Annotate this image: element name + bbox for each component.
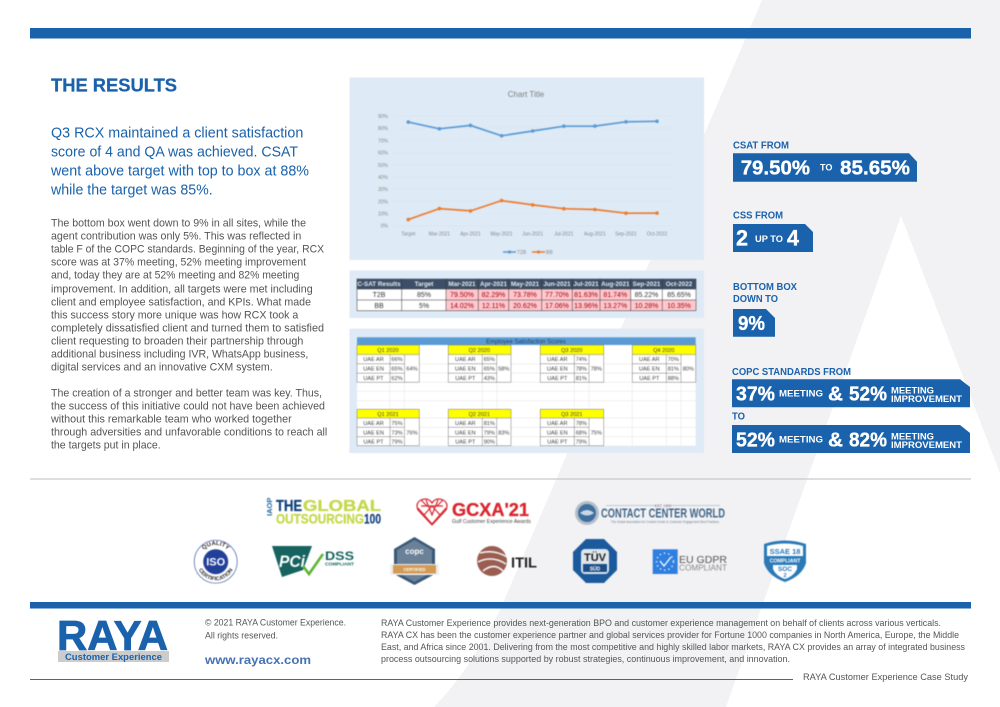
badge: COPC from: MEETING bbox=[779, 389, 823, 399]
stat: CSAT: 79.50% bbox=[741, 157, 810, 180]
logo: ITIL bbox=[477, 546, 537, 576]
body paragraph one: table F of the COPC standards. Beginning of the year, RCX bbox=[51, 243, 324, 255]
row BB: 12.11% bbox=[482, 303, 505, 310]
block: Q2 2020: 58% bbox=[498, 366, 509, 372]
table header row: May-2021 bbox=[511, 281, 540, 288]
block: Q4 2020: UAE PT bbox=[639, 376, 660, 382]
logo: RAYA Customer Experience: Customer Experience bbox=[65, 652, 162, 662]
chart legend: T2B bbox=[517, 250, 527, 256]
x axis labels: Mar-2021 bbox=[429, 232, 450, 238]
logo: Contact Center World: The Global Association for Contact Center & Customer Engagement Best Practices bbox=[611, 520, 719, 524]
logo: PCI DSS compliant: PCi bbox=[279, 552, 306, 571]
block: Q4 2020: 70% bbox=[668, 357, 679, 363]
stat: CSS: UP TO bbox=[755, 234, 783, 245]
logo: ISO quality certification bbox=[193, 539, 238, 584]
block: Q3 2020: Q3 2020 bbox=[561, 348, 583, 354]
block: Q1 2021 bbox=[357, 409, 419, 446]
logo: COPC certified: copc bbox=[405, 547, 424, 556]
row T2B: 73.78% bbox=[513, 292, 537, 299]
logo: PCI DSS compliant bbox=[272, 546, 354, 577]
table title bbox=[357, 337, 696, 346]
body paragraph one bbox=[51, 218, 324, 373]
x axis labels: Target bbox=[401, 232, 416, 238]
y axis labels: 90% bbox=[378, 114, 389, 120]
body paragraph one: additional business including IVR, WhatsApp business, bbox=[51, 349, 308, 361]
block: Q3 2021 bbox=[540, 409, 604, 446]
block: Q3 2021: UAE AR bbox=[547, 421, 568, 427]
x axis labels: Aug-2021 bbox=[584, 232, 606, 238]
stat: bottom box: 9% bbox=[738, 312, 765, 335]
block: Q4 2020: UAE AR bbox=[639, 357, 660, 363]
table header row: Aug-2021 bbox=[601, 281, 630, 288]
x axis labels: Oct-2022 bbox=[647, 232, 667, 238]
row T2B: 85.22% bbox=[635, 292, 658, 299]
body paragraph two: through adversities and unfavorable conditions to reach all bbox=[51, 426, 327, 438]
block: Q4 2020: 88% bbox=[668, 376, 679, 382]
logo: SSAE 18 SOC 2: SOC bbox=[778, 566, 792, 573]
badge: COPC to: 82% bbox=[849, 428, 887, 451]
logo: SSAE 18 SOC 2: SSAE 18 bbox=[770, 547, 800, 556]
block: Q2 2021: 90% bbox=[484, 439, 495, 445]
panel: C-SAT results table bbox=[350, 270, 704, 318]
heading: the results: THE RESULTS bbox=[51, 75, 177, 96]
logo: Global Outsourcing 100: IAOP bbox=[265, 498, 274, 516]
badge: COPC from: 52% bbox=[849, 382, 887, 405]
table header row: Jun-2021 bbox=[543, 281, 571, 288]
logo: EU GDPR compliant bbox=[653, 549, 727, 574]
block: Q3 2021: 68% bbox=[576, 430, 587, 436]
y axis labels: 50% bbox=[378, 163, 389, 169]
lead paragraph: Q3 RCX maintained a client satisfaction bbox=[51, 126, 303, 142]
body paragraph one: digital services and an innovative CXM system. bbox=[51, 361, 273, 373]
stat: CSAT: TO bbox=[820, 163, 832, 173]
row BB: 14.02% bbox=[450, 303, 474, 310]
block: Q2 2020: UAE PT bbox=[455, 376, 476, 382]
block: Q1 2021: 76% bbox=[406, 430, 418, 436]
y axis labels: 40% bbox=[378, 175, 389, 181]
block: Q2 2020 bbox=[448, 345, 511, 382]
block: Q2 2021: 79% bbox=[484, 430, 495, 436]
body paragraph one: agent contribution was only 5%. This was reflected in bbox=[51, 230, 301, 242]
y axis labels bbox=[378, 114, 389, 230]
panel: line chart bbox=[350, 78, 704, 260]
table header row: Mar-2021 bbox=[448, 281, 476, 288]
table title: Employee Satisfaction Scores bbox=[486, 340, 566, 346]
block: Q3 2021: UAE EN bbox=[547, 430, 568, 436]
logo: COPC certified bbox=[390, 537, 439, 585]
block: Q1 2021: UAE PT bbox=[363, 439, 384, 445]
stat: COPC standards: COPC STANDARDS FROM bbox=[732, 367, 851, 378]
body paragraph one: client and employee satisfaction, and KPIs. What made bbox=[51, 296, 311, 308]
copyright text: © 2021 RAYA Customer Experience. bbox=[205, 618, 346, 629]
company description: East, and Africa since 2001. Delivering from the most competitive and highly skilled labor markets, RAYA CX provides an array of integrated business bbox=[381, 642, 965, 653]
body paragraph one: completely dissatisfied client and turned them to satisfied bbox=[51, 323, 324, 335]
block: Q2 2021: Q2 2021 bbox=[469, 412, 490, 418]
lead paragraph bbox=[50, 126, 309, 199]
row BB: 10.35% bbox=[667, 303, 691, 310]
logo: TUV SUD: SÜD bbox=[590, 566, 601, 572]
y axis labels: 60% bbox=[378, 151, 389, 157]
block: Q1 2020: UAE AR bbox=[363, 357, 384, 363]
row BB: 17.06% bbox=[545, 303, 569, 310]
logo: TUV SUD: TÜV bbox=[584, 551, 607, 564]
row T2B: 81.63% bbox=[574, 292, 598, 299]
block: Q2 2021: UAE EN bbox=[455, 430, 476, 436]
block: Q1 2020: UAE PT bbox=[363, 376, 384, 382]
x axis labels: Sep-2021 bbox=[615, 232, 637, 238]
website link text: www.rayacx.com bbox=[204, 653, 311, 667]
logo: PCI DSS compliant: COMPLIANT bbox=[325, 562, 354, 566]
block: Q2 2021: 83% bbox=[498, 430, 509, 436]
logo: ITIL: ITIL bbox=[511, 554, 537, 572]
table header row: Sep-2021 bbox=[633, 281, 661, 288]
logo: Contact Center World: EST. 1999 bbox=[655, 504, 671, 508]
badge: COPC to bbox=[732, 425, 970, 453]
stat: CSS: 2 bbox=[736, 225, 748, 250]
x axis labels: Jun-2021 bbox=[522, 232, 543, 238]
block: Q1 2020: 62% bbox=[391, 376, 403, 382]
block: Q1 2021: Q1 2021 bbox=[377, 412, 399, 418]
copyright text bbox=[205, 618, 346, 642]
series: BB bbox=[406, 199, 659, 221]
row BB: 5% bbox=[419, 303, 429, 310]
block: Q3 2021: 75% bbox=[591, 430, 602, 436]
table header row: C-SAT Results bbox=[357, 281, 401, 288]
logo: Global Outsourcing 100: OUTSOURCING bbox=[276, 510, 364, 526]
block: Q2 2021: UAE AR bbox=[455, 421, 476, 427]
logo: Global Outsourcing 100 bbox=[265, 498, 381, 526]
row T2B: 85% bbox=[417, 292, 431, 299]
x axis labels: Apr-2021 bbox=[460, 232, 481, 238]
logo: EU GDPR compliant: COMPLIANT bbox=[679, 564, 727, 572]
x axis labels: May-2021 bbox=[490, 232, 513, 238]
block: Q2 2021: UAE PT bbox=[455, 439, 476, 445]
badge: COPC to: & bbox=[828, 428, 843, 451]
company description: RAYA CX has been the customer experience partner and global services provider for Fortune 1000 companies in North America, Europe, the Middle bbox=[381, 630, 959, 641]
block: Q3 2020: 81% bbox=[576, 376, 587, 382]
block: Q3 2020: UAE AR bbox=[547, 357, 568, 363]
row T2B: T2B bbox=[373, 292, 386, 299]
body paragraph one: improvement. In addition, all targets were met including bbox=[51, 284, 313, 296]
body paragraph two: without this remarkable team who worked together bbox=[50, 414, 292, 426]
logo: ISO quality certification: CERTIFICATION bbox=[198, 568, 234, 582]
lead paragraph: while the target was 85%. bbox=[50, 183, 213, 199]
row BB: 13.27% bbox=[603, 303, 627, 310]
stat: COPC standards: TO bbox=[732, 411, 745, 422]
logo: SSAE 18 SOC 2: 2 bbox=[783, 573, 787, 579]
block: Q1 2020: 66% bbox=[391, 357, 403, 363]
block: Q4 2020: Q4 2020 bbox=[653, 348, 675, 354]
badge: COPC from: MEETING bbox=[891, 386, 934, 396]
block: Q3 2021: 79% bbox=[576, 439, 587, 445]
chart legend: BB bbox=[546, 250, 553, 256]
stat: bottom box: DOWN TO bbox=[733, 294, 778, 305]
y axis labels: 10% bbox=[378, 212, 389, 218]
block: Q3 2021: UAE PT bbox=[547, 439, 568, 445]
row T2B bbox=[373, 292, 691, 299]
y axis labels: 20% bbox=[378, 199, 389, 205]
badge: COPC from bbox=[732, 379, 970, 407]
block: Q4 2020: 81% bbox=[668, 366, 679, 372]
table header row: Target bbox=[415, 281, 434, 288]
logo: TUV SUD bbox=[573, 539, 617, 583]
logo: PCI DSS compliant: DSS bbox=[325, 551, 354, 563]
block: Q1 2021: 79% bbox=[391, 439, 403, 445]
table header row: Oct-2022 bbox=[666, 281, 693, 288]
logo: Contact Center World bbox=[575, 501, 725, 525]
block: Q1 2020: 65% bbox=[391, 366, 403, 372]
block: Q1 2021: 75% bbox=[391, 421, 403, 427]
block: Q3 2021: Q3 2021 bbox=[561, 412, 583, 418]
body paragraph one: client requesting to broaden their partnership through bbox=[51, 335, 303, 347]
body paragraph one: and, today they are at 52% meeting and 82% meeting bbox=[51, 270, 299, 282]
logo: SSAE 18 SOC 2 bbox=[764, 540, 806, 582]
body paragraph two: the success of this initiative could not have been achieved bbox=[51, 400, 325, 412]
badge: COPC from: 37% bbox=[736, 382, 775, 405]
block: Q1 2021: UAE EN bbox=[363, 430, 384, 436]
table header row: Apr-2021 bbox=[480, 281, 507, 288]
badge: COPC from: IMPROVEMENT bbox=[891, 394, 963, 404]
block: Q2 2020: 43% bbox=[484, 376, 495, 382]
block: Q1 2021: UAE AR bbox=[363, 421, 384, 427]
row T2B: 79.50% bbox=[450, 292, 474, 299]
block: Q1 2020: 64% bbox=[406, 366, 418, 372]
row T2B: 81.74% bbox=[603, 292, 627, 299]
block: Q3 2020: 78% bbox=[576, 366, 587, 372]
footer label: RAYA Customer Experience Case Study bbox=[803, 672, 968, 683]
logo: GCXA 21: Gulf Customer Experience Awards bbox=[452, 519, 532, 525]
logo: Contact Center World: CONTACT CENTER WORLD bbox=[601, 506, 725, 520]
block: Q2 2021 bbox=[448, 409, 511, 446]
badge: COPC from: & bbox=[828, 382, 843, 405]
block: Q1 2020 bbox=[357, 345, 419, 382]
body paragraph two bbox=[50, 388, 327, 451]
block: Q2 2020: 65% bbox=[484, 357, 495, 363]
chart legend bbox=[503, 250, 553, 256]
y axis labels: 0% bbox=[381, 224, 389, 230]
badge: COPC to: MEETING bbox=[779, 435, 823, 445]
company description: RAYA Customer Experience provides next-generation BPO and customer experience management on behalf of clients across various verticals. bbox=[381, 618, 941, 629]
row T2B: 82.29% bbox=[482, 292, 505, 299]
logo: GCXA 21 bbox=[417, 499, 532, 525]
stat: CSAT: 85.65% bbox=[840, 157, 910, 180]
logo: COPC certified: CERTIFIED bbox=[403, 567, 426, 572]
body paragraph two: the targets put in place. bbox=[51, 439, 161, 451]
block: Q1 2020: Q1 2020 bbox=[377, 348, 399, 354]
logo: Global Outsourcing 100: GLOBAL bbox=[303, 498, 381, 515]
row BB: 13.96% bbox=[574, 303, 598, 310]
copyright text: All rights reserved. bbox=[205, 631, 278, 642]
stat: CSAT: CSAT FROM bbox=[733, 140, 789, 152]
block: Q4 2020: UAE EN bbox=[639, 366, 660, 372]
y axis labels: 80% bbox=[378, 126, 389, 132]
x axis labels: Jul-2021 bbox=[554, 232, 574, 238]
stat: CSS bbox=[733, 211, 813, 252]
block: Q1 2020: UAE EN bbox=[363, 366, 384, 372]
body paragraph two: The creation of a stronger and better team was key. Thus, bbox=[51, 388, 322, 400]
table header row bbox=[357, 281, 693, 288]
logo: Global Outsourcing 100: 100 bbox=[364, 510, 381, 526]
logo: RAYA Customer Experience: RAYA bbox=[57, 612, 168, 659]
block: Q3 2021: 78% bbox=[576, 421, 587, 427]
logo: ISO quality certification: ISO bbox=[206, 556, 226, 568]
block: Q3 2020: 78% bbox=[591, 366, 602, 372]
block: Q2 2020: 65% bbox=[484, 366, 495, 372]
row BB bbox=[374, 303, 691, 310]
stat: COPC standards bbox=[732, 367, 970, 453]
chart title: Chart Title bbox=[508, 90, 545, 99]
block: Q4 2020: 80% bbox=[683, 366, 694, 372]
block: Q2 2021: 81% bbox=[484, 421, 495, 427]
body paragraph one: this success story more unique was how RCX took a bbox=[51, 309, 299, 321]
row T2B: 85.65% bbox=[667, 292, 691, 299]
row BB: 10.28% bbox=[635, 303, 658, 310]
stat: CSAT bbox=[733, 140, 917, 182]
row BB: BB bbox=[374, 303, 384, 310]
badge: COPC to: 52% bbox=[736, 428, 775, 451]
logo: ISO quality certification: QUALITY bbox=[201, 540, 230, 550]
block: Q3 2020: UAE PT bbox=[547, 376, 568, 382]
stat: bottom box bbox=[733, 282, 797, 337]
table header row: Jul-2021 bbox=[573, 281, 599, 288]
block: Q2 2020: UAE EN bbox=[455, 366, 476, 372]
block: Q4 2020 bbox=[632, 345, 696, 382]
logo: EU GDPR compliant: EU GDPR bbox=[679, 554, 727, 566]
lead paragraph: went above target with top to box at 88% bbox=[50, 164, 309, 180]
y axis labels: 30% bbox=[378, 187, 389, 193]
y axis labels: 70% bbox=[378, 138, 389, 144]
series: T2B bbox=[406, 120, 659, 138]
logo: SSAE 18 SOC 2: COMPLIANT bbox=[770, 558, 801, 564]
stat: bottom box: BOTTOM BOX bbox=[733, 282, 797, 293]
logo: GCXA 21: GCXA'21 bbox=[452, 500, 529, 520]
block: Q1 2021: 73% bbox=[391, 430, 403, 436]
stat: CSS: CSS FROM bbox=[733, 211, 783, 222]
row T2B: 77.70% bbox=[545, 292, 569, 299]
body paragraph one: The bottom box went down to 9% in all sites, while the bbox=[51, 218, 306, 230]
body paragraph one: score was at 37% meeting, 52% meeting improvement bbox=[51, 257, 307, 269]
lead paragraph: score of 4 and QA was achieved. CSAT bbox=[51, 145, 298, 161]
badge: COPC to: MEETING bbox=[891, 432, 934, 442]
block: Q3 2020: UAE EN bbox=[547, 366, 568, 372]
company description: process outsourcing solutions supported by robust strategies, continuous improvement, and innovation. bbox=[381, 654, 790, 665]
block: Q3 2020 bbox=[540, 345, 604, 382]
panel: employee satisfaction scores bbox=[350, 329, 704, 453]
block: Q2 2020: Q2 2020 bbox=[469, 348, 490, 354]
block: Q2 2020: UAE AR bbox=[455, 357, 476, 363]
block: Q3 2020: 74% bbox=[576, 357, 587, 363]
badge: COPC to: IMPROVEMENT bbox=[891, 440, 963, 450]
company description bbox=[381, 618, 965, 665]
stat: CSS: 4 bbox=[787, 225, 800, 250]
row BB: 20.62% bbox=[513, 303, 537, 310]
logo: Global Outsourcing 100: THE bbox=[276, 498, 302, 515]
x axis labels bbox=[401, 232, 667, 238]
